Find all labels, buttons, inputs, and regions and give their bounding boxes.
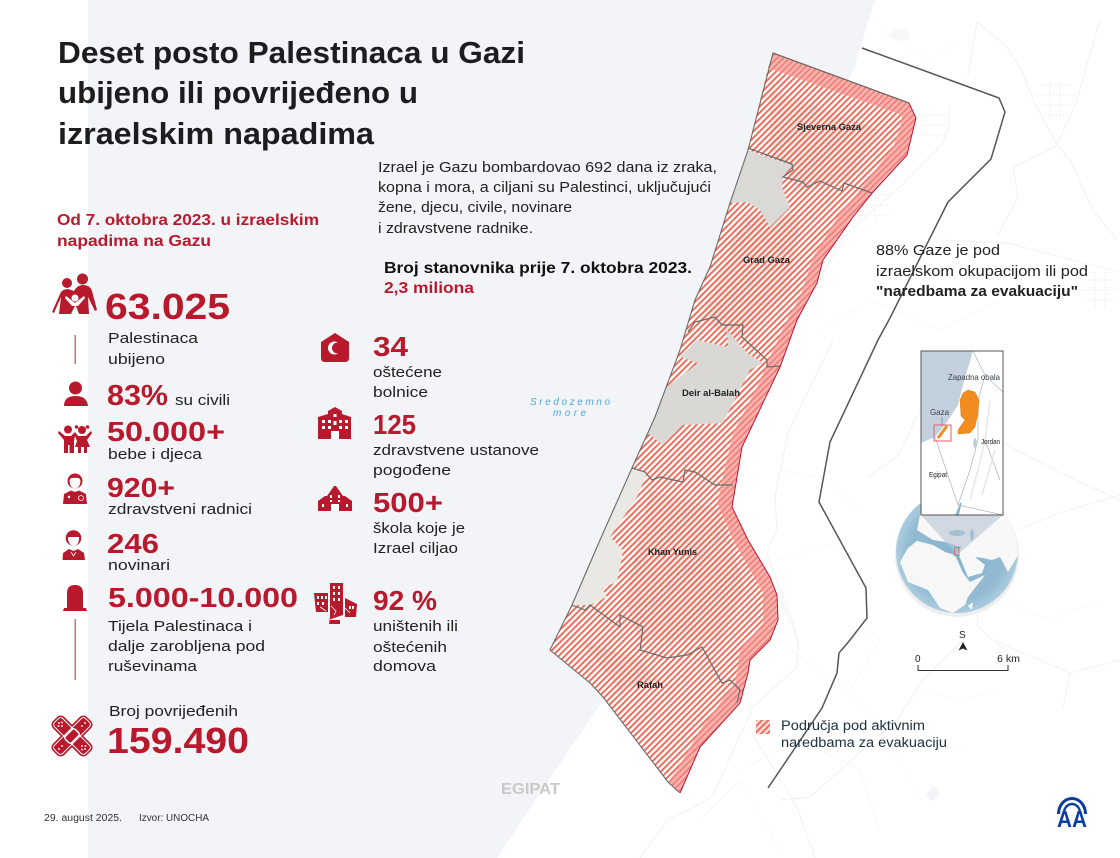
map: Gaza strip <box>550 53 916 793</box>
stat: children: bebe i djeca <box>108 446 203 463</box>
stat: health facilities: 125 <box>373 409 416 440</box>
stat: health workers: zdravstveni radnici <box>108 501 252 518</box>
north arrow: S <box>959 630 966 641</box>
title: izraelskim napadima <box>58 116 375 151</box>
stat: schools: škola koje je <box>373 520 465 537</box>
stat: killed: Palestinaca <box>108 330 199 347</box>
scale bar: 6 km <box>997 654 1020 665</box>
icon: journalist <box>62 530 85 560</box>
stat: hospitals: bolnice <box>373 384 428 401</box>
locator globe <box>895 503 1019 617</box>
stat: schools: Izrael ciljao <box>373 540 458 557</box>
stat: wounded <box>49 703 249 761</box>
intro text: i zdravstvene radnike. <box>378 220 533 237</box>
stat: destroyed homes <box>314 583 458 675</box>
stat: hospitals: oštećene <box>373 364 442 381</box>
legend: evacuation areas: naredbama za evakuaciju <box>781 735 947 750</box>
map labels: Khan Yunis <box>648 547 697 557</box>
occupation note: izraelskom okupacijom ili pod <box>876 263 1088 280</box>
stat: children: 50.000+ <box>107 416 225 447</box>
stat: bodies under rubble <box>63 582 298 680</box>
locator inset map: Zapadna obala <box>948 373 1001 382</box>
stat: civilians: 83% <box>107 380 168 412</box>
stat: children <box>58 416 225 463</box>
subheading: Od 7. oktobra 2023. u izraelskim <box>57 212 319 229</box>
legend: evacuation areas: Područja pod aktivnim <box>781 718 925 733</box>
land road network <box>640 20 1120 858</box>
stat: schools <box>318 486 465 557</box>
icon: family <box>52 274 97 314</box>
background: sea <box>88 0 875 858</box>
stat: health facilities: pogođene <box>373 462 451 479</box>
icon: ruined buildings <box>314 583 357 624</box>
stat: civilians <box>64 380 230 412</box>
unhatched built-up patches <box>730 150 792 227</box>
label: Egypt: EGIPAT <box>501 781 560 798</box>
stat: destroyed homes: uništenih ili <box>373 618 458 635</box>
stat: wounded: Broj povrijeđenih <box>109 703 238 720</box>
map labels: Deir al-Balah <box>682 388 740 398</box>
stat: destroyed homes: domova <box>373 658 437 675</box>
stat: schools: 500+ <box>373 487 443 518</box>
title: ubijeno ili povrijeđeno u <box>58 75 418 110</box>
intro text: Izrael je Gazu bombardovao 692 dana iz zraka, <box>378 159 717 176</box>
icon: person <box>64 382 88 406</box>
stat: hospitals: 34 <box>373 331 408 362</box>
icon: doctor <box>63 474 87 504</box>
locator inset map: Jordan <box>981 439 1000 446</box>
map labels: Sjeverna Gaza <box>797 122 862 132</box>
scale bar <box>915 654 1020 670</box>
scale bar: 0 <box>915 654 921 665</box>
subheading: napadima na Gazu <box>57 233 211 250</box>
evacuation order zone <box>550 68 902 782</box>
stat: health facilities <box>318 407 539 479</box>
stat: health facilities: zdravstvene ustanove <box>373 442 539 459</box>
population before war: 2,3 miliona <box>384 280 474 297</box>
stat: bodies under rubble: Tijela Palestinaca i <box>108 618 252 635</box>
icon: tombstone <box>63 585 87 611</box>
stat: bodies under rubble: dalje zarobljena pod <box>108 638 265 655</box>
stat: killed <box>52 274 230 368</box>
population before war <box>384 260 692 297</box>
stat: civilians: su civili <box>175 392 230 409</box>
stat: journalists: 246 <box>107 528 159 559</box>
israel border line <box>768 48 1005 788</box>
stat: wounded: 159.490 <box>107 720 249 761</box>
logo: Anadolu Agency: AA <box>1057 806 1087 832</box>
footer: date and source <box>44 813 209 824</box>
north arrow <box>958 630 968 650</box>
label: Mediterranean Sea <box>530 397 610 419</box>
stat: journalists <box>62 528 170 574</box>
intro text: žene, djecu, civile, novinare <box>378 199 572 216</box>
legend: evacuation areas <box>756 718 947 750</box>
icon: health building <box>318 407 351 439</box>
occupation note: "naredbama za evakuaciju" <box>876 283 1078 300</box>
governorate borders <box>748 148 872 193</box>
locator inset map <box>921 351 1003 515</box>
stat: health workers <box>63 472 252 518</box>
icon: bandage <box>49 713 95 759</box>
locator inset map: Egipat <box>929 472 947 479</box>
stat: journalists: novinari <box>108 557 170 574</box>
map labels: Grad Gaza <box>743 255 791 265</box>
stat: destroyed homes: 92 % <box>373 585 437 616</box>
stat: killed: ubijeno <box>108 351 165 368</box>
title: Deset posto Palestinaca u Gazi <box>58 35 525 70</box>
eastern red edge <box>680 53 916 793</box>
subheading <box>57 212 319 250</box>
footer: date and source: 29. august 2025. <box>44 813 122 824</box>
locator inset map: Gaza <box>930 407 949 417</box>
buffer zone <box>668 53 916 793</box>
stat: bodies under rubble: 5.000-10.000 <box>108 582 298 613</box>
stat: destroyed homes: oštećenih <box>373 639 447 656</box>
stat: hospitals <box>321 331 442 401</box>
population before war: Broj stanovnika prije 7. oktobra 2023. <box>384 260 692 277</box>
intro text: kopna i mora, a ciljani su Palestinci, uključujući <box>378 179 711 196</box>
footer: date and source: Izvor: UNOCHA <box>139 813 209 824</box>
occupation note <box>876 242 1088 300</box>
label: Mediterranean Sea: Sredozemno <box>530 397 610 408</box>
occupation note: 88% Gaze je pod <box>876 242 1000 259</box>
title <box>58 35 525 151</box>
West Bank <box>958 390 979 434</box>
map labels <box>637 122 862 690</box>
Gaza on inset <box>938 426 947 438</box>
icon: hospital crescent <box>321 333 349 362</box>
icon: school <box>318 486 352 511</box>
intro text <box>378 159 717 237</box>
stat: health workers: 920+ <box>107 472 175 503</box>
icon: children <box>58 425 92 453</box>
stat: bodies under rubble: ruševinama <box>108 658 198 675</box>
map labels: Rafah <box>637 680 663 690</box>
label: Mediterranean Sea: more <box>553 408 586 419</box>
stat: killed: 63.025 <box>105 286 230 327</box>
coast outline <box>550 53 909 793</box>
